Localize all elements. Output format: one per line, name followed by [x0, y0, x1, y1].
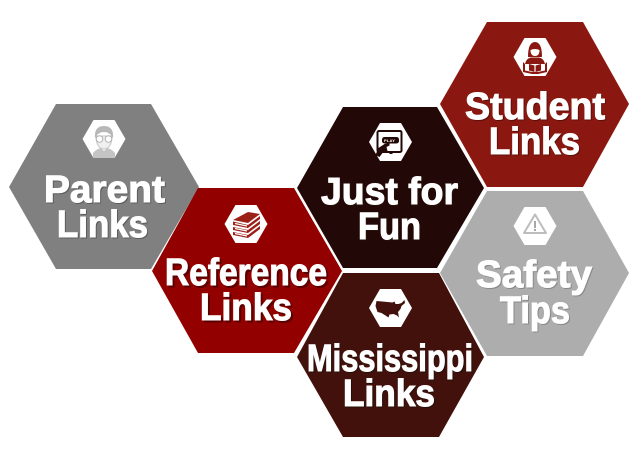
label: Parent Links: Links [57, 204, 148, 246]
label: Mississippi Links: Links [343, 373, 435, 415]
panel: mississippi links [297, 273, 484, 437]
label: Safety Tips: Safety [476, 254, 592, 296]
panel: reference links [152, 188, 342, 353]
icon: student reading a book [514, 38, 556, 76]
label: Parent Links: Parent [44, 169, 165, 211]
icon: parent with glasses [82, 120, 126, 158]
label: Student Links [465, 86, 605, 163]
label: Safety Tips: Tips [500, 290, 570, 332]
label: Safety Tips [476, 254, 592, 332]
panel: just for fun [297, 107, 484, 268]
label: Mississippi Links: Mississippi [307, 338, 473, 380]
icon: hand pressing play on a screen [369, 123, 412, 161]
label: Reference Links [165, 252, 327, 329]
panel: student links [440, 22, 629, 187]
label: Just for Fun: Fun [358, 206, 421, 248]
label: Reference Links: Reference [165, 252, 327, 294]
label: Reference Links: Links [200, 287, 292, 329]
label: Student Links: Links [489, 121, 580, 163]
label: Just for Fun: Just for [321, 171, 458, 213]
label: Mississippi Links [307, 338, 473, 415]
icon: warning triangle [514, 207, 556, 245]
panel: safety tips [440, 191, 629, 356]
panel: parent links [9, 104, 199, 269]
icon: map of the United States [369, 289, 412, 327]
label: Just for Fun [321, 171, 458, 248]
label: Student Links: Student [465, 86, 605, 128]
icon: stack of books [224, 205, 268, 243]
icon: hand pressing play on a screen: PLAY [384, 138, 395, 143]
label: Parent Links [44, 169, 165, 246]
